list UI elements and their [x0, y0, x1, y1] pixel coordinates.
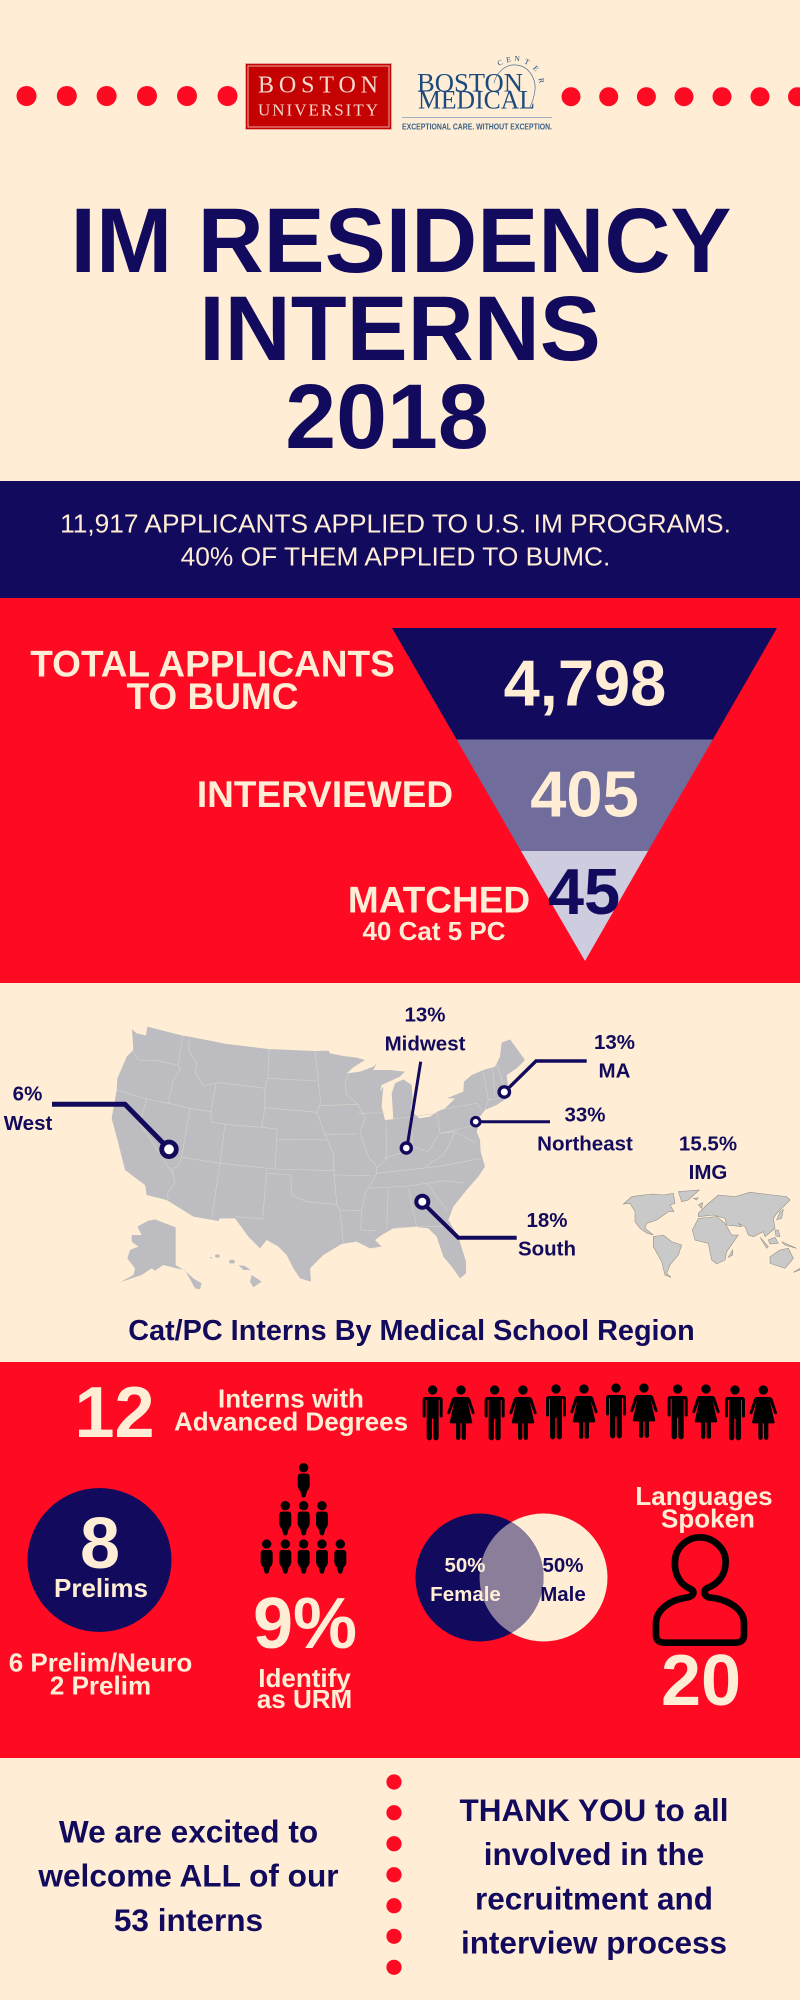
funnel label: interviewed: INTERVIEWED [197, 774, 453, 815]
funnel label: matched: MATCHED [348, 880, 530, 921]
text: thank you message: THANK YOU to all [460, 1792, 728, 1828]
stat: 9% URM: Identify [258, 1663, 351, 1693]
stat: languages spoken heading: Languages [635, 1481, 773, 1511]
header: logos and dotted row [16, 54, 800, 132]
text: welcome message: 53 interns [114, 1902, 263, 1938]
text: welcome message [37, 1814, 339, 1938]
logo: Boston Medical Center: N [514, 54, 521, 63]
map label: West [4, 1083, 52, 1135]
title: 2018 [285, 366, 489, 468]
logo: Boston University: BOSTON [258, 73, 378, 99]
chart: gender venn diagram: Male [540, 1583, 586, 1606]
map label: IMG [679, 1133, 737, 1184]
map pointer: West [52, 1104, 176, 1157]
chart: gender venn diagram [416, 1514, 608, 1642]
stat: 12 advanced degrees [74, 1373, 408, 1453]
logo: Boston Medical Center: T [523, 57, 531, 67]
chart: gender venn diagram: 50% [542, 1554, 584, 1577]
stat: 8 prelims circle [28, 1488, 172, 1632]
heading: map caption: Cat/PC Interns By Medical School Region [128, 1315, 695, 1347]
logo: Boston Medical Center: C [496, 58, 504, 68]
stat: 20 languages: 20 [661, 1641, 741, 1721]
stat: 8 prelims circle: 8 [80, 1504, 120, 1584]
text: prelim breakdown [9, 1648, 192, 1701]
funnel value: 4,798: 4,798 [504, 647, 666, 720]
logo: Boston Medical Center: BOSTON [417, 69, 523, 98]
map pointer: MA [499, 1061, 587, 1097]
map label: Northeast: Northeast [537, 1133, 633, 1156]
map label: Midwest: 13% [404, 1004, 446, 1027]
text: thank you message [460, 1792, 728, 1960]
stat: 12 advanced degrees: Interns with [218, 1384, 364, 1414]
map label: West: West [4, 1112, 52, 1135]
logo: Boston Medical Center [402, 54, 552, 132]
map label: Midwest: Midwest [385, 1033, 466, 1056]
map label: IMG: 15.5% [679, 1133, 737, 1156]
panel: applicant funnel [0, 598, 800, 983]
panel: statistics [0, 1362, 800, 1758]
map label: Northeast [537, 1104, 633, 1156]
funnel label: total applicants [30, 644, 395, 717]
funnel label: matched [348, 880, 530, 946]
panel: applicants band [0, 481, 800, 598]
text: prelim breakdown: 2 Prelim [50, 1671, 151, 1701]
icon: person outline [656, 1537, 744, 1643]
stat: 8 prelims circle: Prelims [54, 1573, 148, 1603]
logo: Boston Medical Center: E [505, 55, 512, 64]
text: welcome message: We are excited to [59, 1814, 318, 1850]
logo: Boston Medical Center: E [531, 64, 541, 73]
funnel label: total applicants: TO BUMC [127, 676, 298, 717]
divider: vertical dots [386, 1774, 402, 1975]
stat: 9% URM: 9% [253, 1584, 357, 1664]
logo: Boston University [246, 64, 392, 130]
funnel label: matched: 40 Cat 5 PC [362, 916, 506, 946]
panel: applicants band: 11,917 APPLICANTS APPLIED TO U.S. IM PROGRAMS. [60, 509, 731, 539]
panel: applicants band: 40% OF THEM APPLIED TO BUMC. [181, 542, 610, 572]
map label: Northeast: 33% [564, 1104, 606, 1127]
text: prelim breakdown: 6 Prelim/Neuro [9, 1648, 192, 1678]
title: INTERNS [199, 278, 601, 380]
map: continental US with Alaska and Hawaii [112, 1027, 525, 1289]
stat: 9% URM [253, 1584, 357, 1714]
logo: Boston Medical Center: R [537, 77, 546, 84]
stat: 9% URM: as URM [257, 1684, 352, 1714]
stat: languages spoken heading [635, 1481, 773, 1534]
map label: South [518, 1209, 576, 1261]
map pointer: Northeast [471, 1117, 550, 1126]
text: welcome message: welcome ALL of our [37, 1858, 339, 1894]
map label: South: 18% [526, 1209, 568, 1232]
map pointer: Midwest [401, 1062, 421, 1153]
map pointer: South [416, 1196, 517, 1238]
icon: row of twelve people [423, 1383, 777, 1440]
right dotted row [562, 87, 800, 106]
left dotted row [16, 86, 238, 106]
title: IM RESIDENCY [71, 190, 731, 292]
logo: Boston University: UNIVERSITY [258, 101, 378, 120]
icon: world map [623, 1190, 800, 1277]
map label: MA: 13% [594, 1031, 635, 1054]
text: thank you message: involved in the [484, 1836, 704, 1872]
map label: South: South [518, 1238, 576, 1261]
map label: MA: MA [599, 1060, 631, 1083]
map: Alaska [120, 1219, 202, 1289]
map label: IMG: IMG [689, 1161, 727, 1184]
logo: Boston Medical Center: MEDICAL [418, 85, 535, 114]
map label: Midwest [385, 1004, 466, 1056]
chart: gender venn diagram: Female [430, 1583, 501, 1606]
stat: languages spoken heading: Spoken [661, 1504, 755, 1534]
map label: MA [594, 1031, 635, 1083]
map label: West: 6% [13, 1083, 42, 1106]
icon: pyramid of people [261, 1463, 346, 1574]
chart: gender venn diagram: 50% [444, 1554, 486, 1577]
stat: 12 advanced degrees: Advanced Degrees [174, 1407, 408, 1437]
map: Hawaii [210, 1254, 262, 1287]
funnel value: 45: 45 [548, 855, 620, 928]
text: thank you message: interview process [461, 1924, 727, 1960]
stat: 12 advanced degrees: 12 [74, 1373, 155, 1453]
funnel value: 405: 405 [530, 758, 639, 831]
funnel label: total applicants: TOTAL APPLICANTS [30, 644, 395, 685]
funnel chart [392, 628, 777, 961]
title [71, 190, 731, 468]
text: thank you message: recruitment and [475, 1880, 713, 1916]
logo: Boston Medical Center: EXCEPTIONAL CARE. WITHOUT EXCEPTION. [402, 122, 552, 132]
